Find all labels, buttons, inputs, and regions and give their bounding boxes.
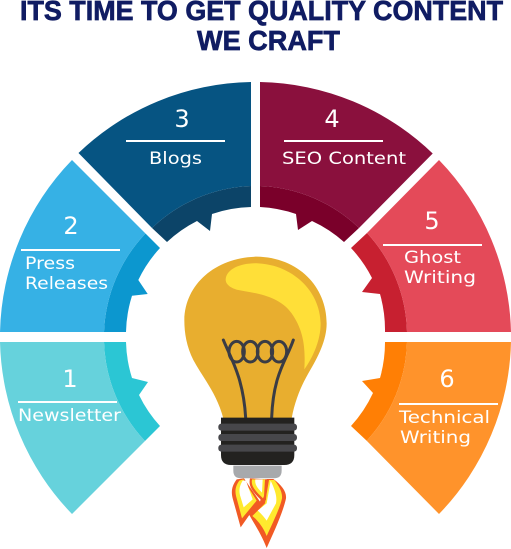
- panel: 4 SEO Content: SEO Content: [282, 149, 407, 168]
- panel: 3 Blogs: Blogs: [149, 149, 202, 168]
- panel: 6 Technical Writing: 6: [439, 365, 455, 393]
- panel: 2 Press Releases: Press: [25, 254, 75, 273]
- title: [20, 0, 503, 56]
- panel: 5 Ghost Writing: 5: [424, 207, 440, 235]
- panel: 4 SEO Content: 4: [324, 105, 340, 133]
- panel: 3 Blogs: [78, 82, 251, 242]
- panel: 1 Newsletter: [0, 342, 160, 514]
- panel: 3 Blogs: 3: [174, 105, 190, 133]
- panel: 2 Press Releases: Releases: [25, 274, 108, 293]
- panel: 6 Technical Writing: [351, 342, 511, 514]
- panel: 1 Newsletter: Newsletter: [18, 406, 121, 425]
- panel: 5 Ghost Writing: [351, 160, 511, 332]
- panel: 6 Technical Writing: Writing: [400, 428, 471, 447]
- panel: 4 SEO Content: [260, 82, 433, 242]
- icon: light bulb: [184, 257, 327, 478]
- panel: 6 Technical Writing: Technical: [398, 408, 490, 427]
- panel: 2 Press Releases: 2: [63, 212, 79, 240]
- panel: 5 Ghost Writing: Ghost: [404, 248, 462, 267]
- panel: 2 Press Releases: [0, 160, 160, 332]
- icon: rocket flames: [232, 478, 286, 548]
- panel: 5 Ghost Writing: Writing: [404, 268, 476, 287]
- title: WE CRAFT: [197, 25, 340, 56]
- panel: 1 Newsletter: 1: [62, 365, 78, 393]
